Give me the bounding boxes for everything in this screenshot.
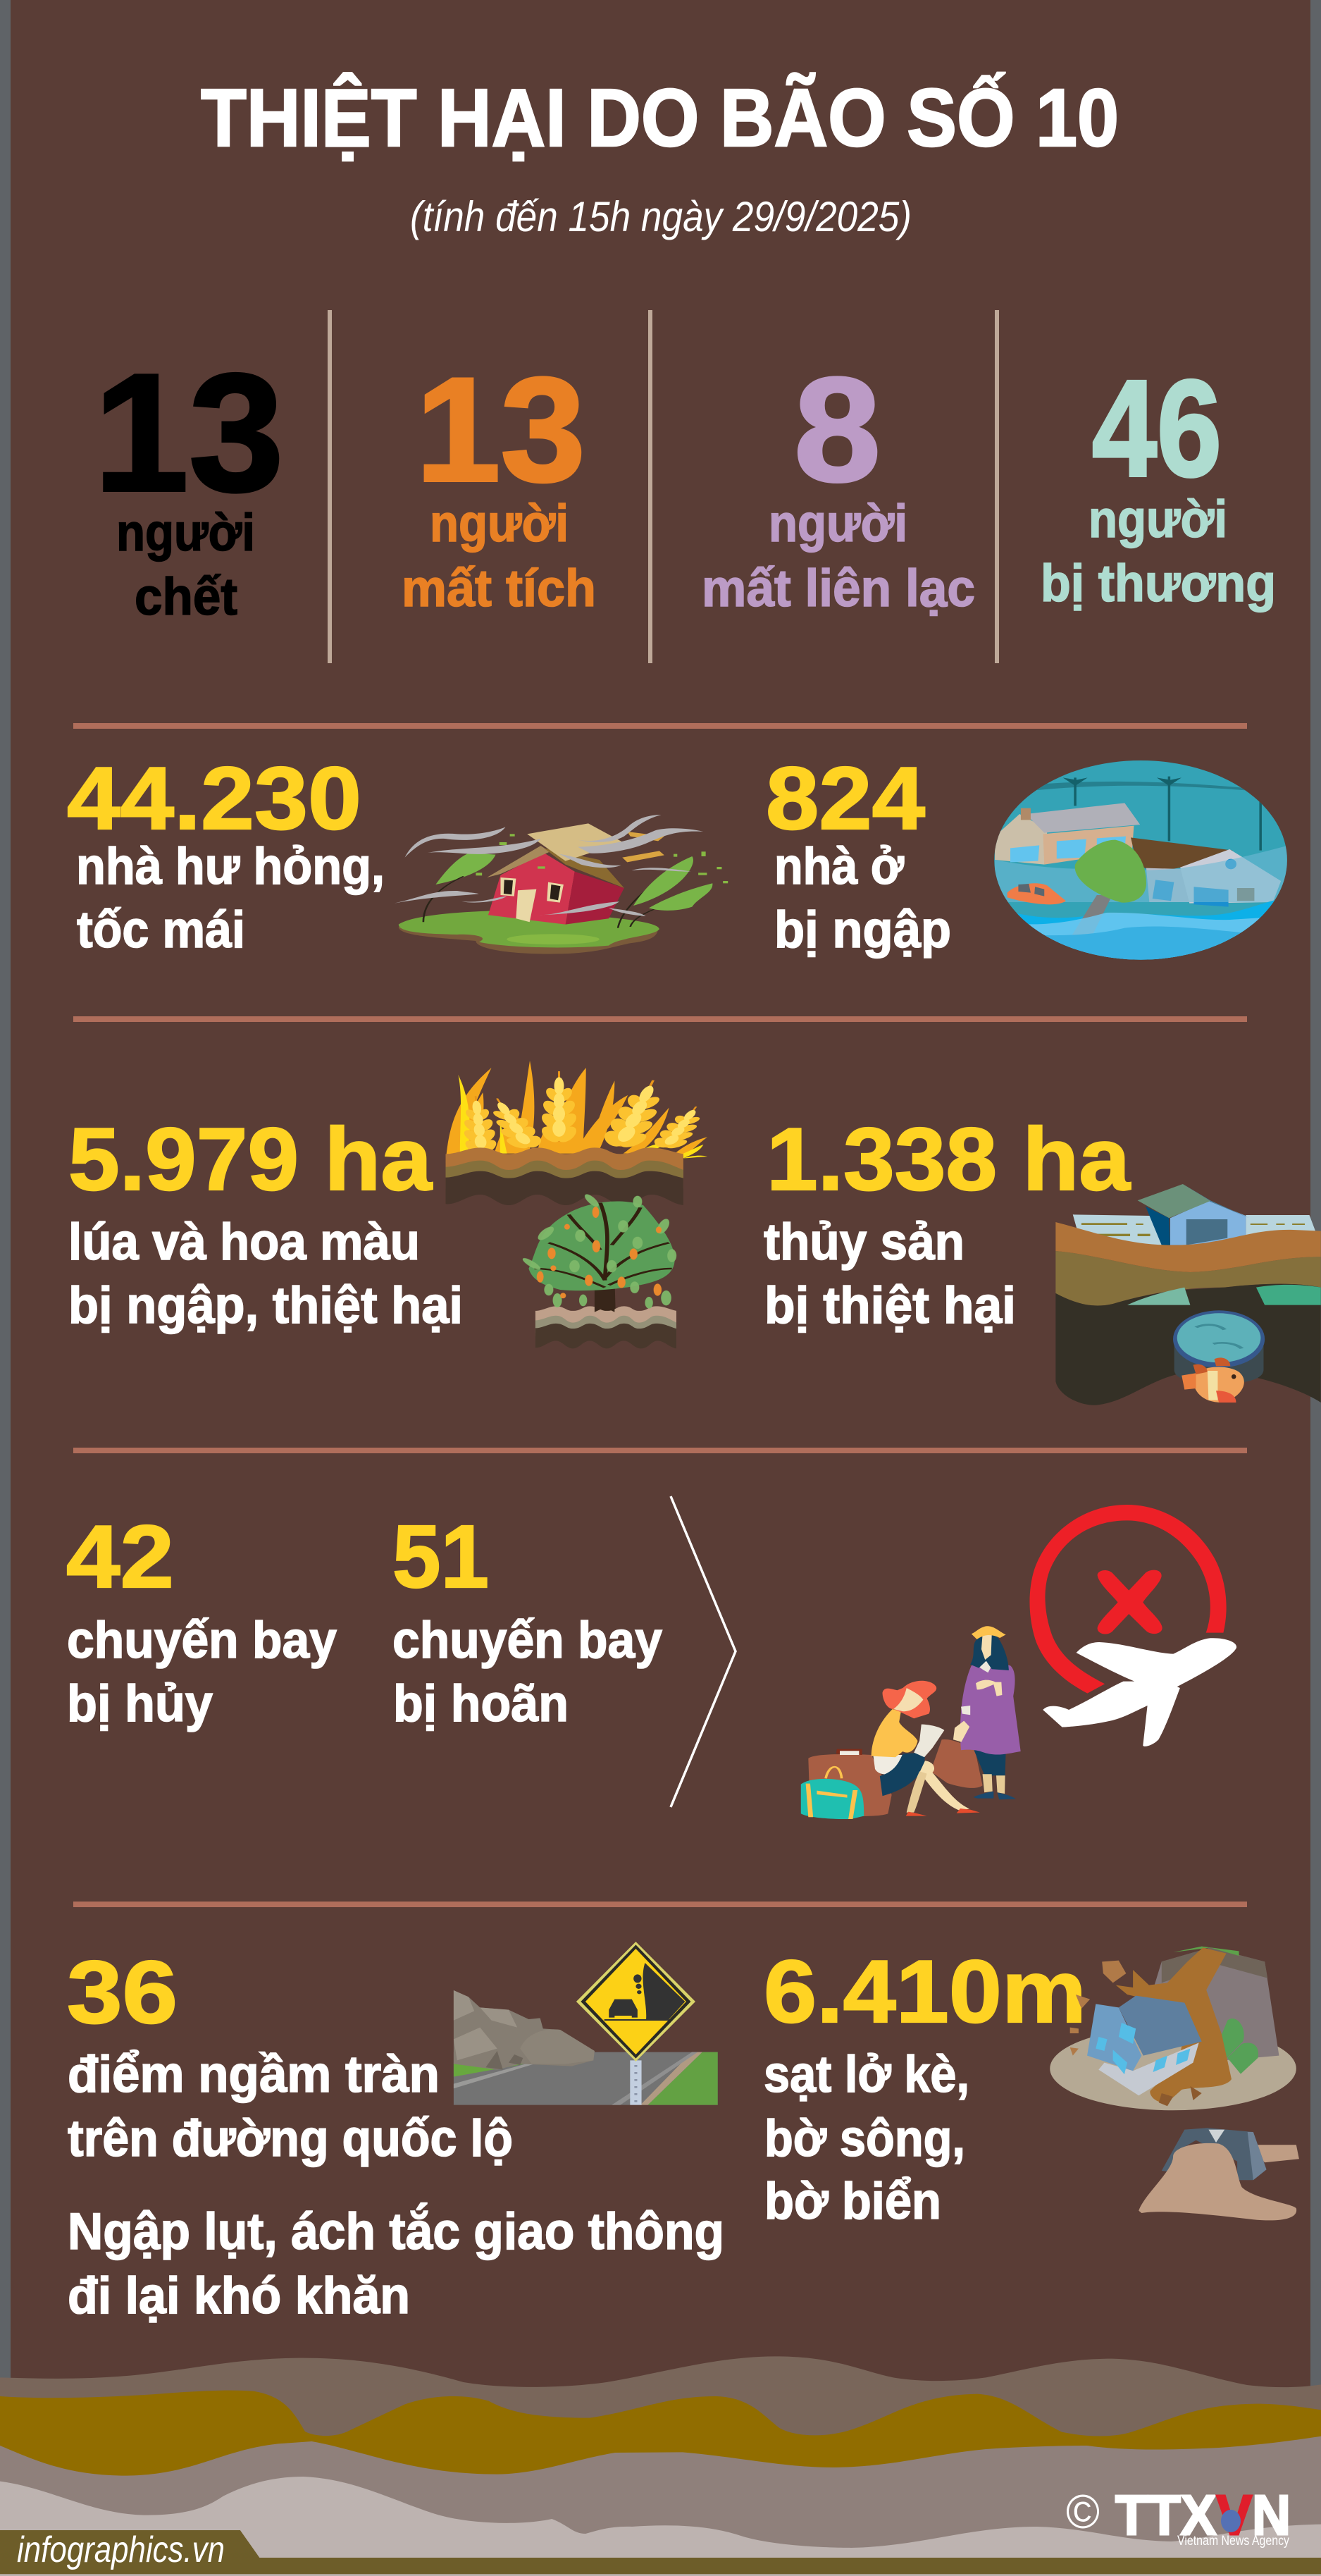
title: THIỆT HẠI DO BÃO SỐ 10 <box>201 72 1119 164</box>
stat: 36 flooded road points: trên đường quốc lộ <box>68 2110 513 2167</box>
text block: traffic difficulties <box>68 2203 724 2324</box>
stat: 44.230 damaged houses: nhà hư hỏng, <box>76 838 385 895</box>
stat: 1.338 ha aquaculture: 1.338 ha <box>767 1109 1131 1209</box>
stat: 44.230 damaged houses <box>67 748 385 959</box>
footer text: infographics.vn: infographics.vn <box>17 2529 225 2570</box>
stat: 42 cancelled flights: chuyến bay <box>67 1612 337 1669</box>
stat: 6.410m erosion: bờ sông, <box>764 2110 965 2167</box>
text block: traffic difficulties: đi lại khó khăn <box>68 2267 410 2324</box>
icon: cancelled flight <box>1029 1505 1236 1746</box>
stat: 13 dead: 13 <box>94 340 284 526</box>
left side bar <box>0 0 11 2576</box>
stat: 13 missing <box>402 347 596 617</box>
stat: 51 delayed flights: 51 <box>392 1507 489 1606</box>
subtitle: (tính đến 15h ngày 29/9/2025) <box>410 193 912 240</box>
stat: 42 cancelled flights: bị hủy <box>67 1675 213 1732</box>
stat: 6.410m erosion <box>764 1942 1086 2230</box>
copyright symbol: © <box>1066 2485 1100 2539</box>
stat: 824 flooded houses: bị ngập <box>774 901 951 959</box>
stat: 51 delayed flights <box>392 1507 662 1732</box>
icon: tunnel on dune <box>1139 2128 1299 2220</box>
stat: 51 delayed flights: bị hoãn <box>393 1675 569 1732</box>
stat: 1.338 ha aquaculture <box>764 1109 1131 1334</box>
stat: 6.410m erosion: 6.410m <box>764 1942 1086 2041</box>
stat: 42 cancelled flights: 42 <box>66 1507 174 1606</box>
stat: 13 dead: chết <box>135 567 237 626</box>
stat: 13 missing: 13 <box>416 347 585 512</box>
stat: 36 flooded road points <box>67 1942 513 2167</box>
stat: 824 flooded houses: nhà ở <box>774 838 904 895</box>
stat: 13 dead: người <box>116 503 255 562</box>
logo: TTXVN: Vietnam News Agency <box>1177 2534 1289 2549</box>
icon: house in storm <box>395 815 728 954</box>
stat: 51 delayed flights: chuyến bay <box>392 1612 662 1669</box>
stat: 8 out of contact: 8 <box>794 347 881 512</box>
stat: 8 out of contact <box>702 347 975 617</box>
stat: 1.338 ha aquaculture: bị thiệt hại <box>764 1277 1016 1334</box>
right side bar <box>1310 0 1321 2576</box>
stat: 8 out of contact: mất liên lạc <box>702 559 975 617</box>
stat: 44.230 damaged houses: tốc mái <box>77 901 245 959</box>
stat: 13 dead <box>94 340 284 626</box>
icon: wheat in soil <box>446 1061 715 1205</box>
panel: casualty statistics <box>94 340 1276 626</box>
logo: TTXVN: TTXVN <box>1115 2484 1291 2546</box>
stat: 42 cancelled flights <box>66 1507 337 1732</box>
icon: landslide destroying house <box>1050 1947 1296 2110</box>
stat: 5.979 ha crops: bị ngập, thiệt hại <box>68 1277 463 1334</box>
stat: 1.338 ha aquaculture: thủy sản <box>764 1214 965 1271</box>
stat: 46 injured: bị thương <box>1041 554 1276 612</box>
stat: 5.979 ha crops <box>68 1109 463 1334</box>
stat: 6.410m erosion: bờ biển <box>764 2173 941 2230</box>
stat: 46 injured: 46 <box>1092 352 1222 505</box>
icon: flooded houses <box>988 759 1291 961</box>
stat: 13 missing: mất tích <box>402 559 596 617</box>
icon: rockfall road sign <box>454 1942 718 2105</box>
stat: 44.230 damaged houses: 44.230 <box>67 748 361 848</box>
stat: 824 flooded houses: 824 <box>766 748 925 848</box>
stat: 5.979 ha crops: 5.979 ha <box>68 1109 433 1209</box>
icon: mango tree in soil <box>519 1194 676 1348</box>
icon: aquaculture pond <box>1055 1184 1321 1405</box>
stat: 36 flooded road points: điểm ngầm tràn <box>68 2046 440 2103</box>
stat: 5.979 ha crops: lúa và hoa màu <box>68 1214 420 1271</box>
stat: 36 flooded road points: 36 <box>67 1942 178 2042</box>
stat: 46 injured <box>1041 352 1276 612</box>
arrow: chevron <box>671 1496 736 1807</box>
panel: bottom wavy footer <box>0 2356 1321 2576</box>
stat: 8 out of contact: người <box>769 494 907 553</box>
stat: 13 missing: người <box>430 494 569 553</box>
stat: 824 flooded houses <box>766 748 951 959</box>
stat: 46 injured: người <box>1089 490 1227 548</box>
text block: traffic difficulties: Ngập lụt, ách tắc giao thông <box>68 2203 724 2260</box>
icon: waiting passengers <box>801 1626 1021 1819</box>
stat: 6.410m erosion: sạt lở kè, <box>764 2046 969 2103</box>
